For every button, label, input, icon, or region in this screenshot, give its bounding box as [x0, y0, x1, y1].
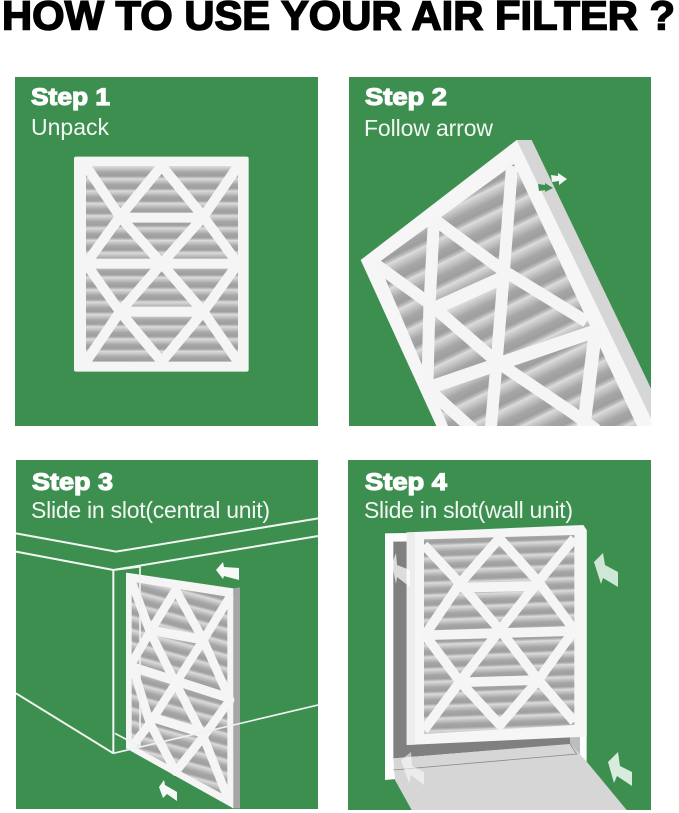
arrow: bottom insertion arrow: [159, 780, 177, 801]
panel: step 1: [15, 77, 318, 426]
step 3 heading: Step 3: [32, 469, 113, 496]
duct lines in front of filter: [113, 567, 318, 753]
air filter in central unit: [126, 573, 240, 808]
step 4 caption: Slide in slot(wall unit): [364, 497, 573, 523]
arrow: lower left: [401, 752, 424, 785]
panel: step 2: [349, 77, 655, 430]
central unit duct outline: [16, 518, 318, 753]
step 4 heading: Step 4: [365, 469, 447, 496]
panel: step 3: [16, 460, 318, 809]
arrow: white direction arrow: [551, 173, 567, 185]
arrow: lower right: [608, 752, 632, 786]
panel: step 4: [348, 460, 651, 810]
arrow: upper right: [594, 553, 618, 587]
step 2 caption: Follow arrow: [364, 115, 493, 141]
wall unit slot and floor: [385, 530, 627, 810]
arrow: upper left: [392, 553, 410, 587]
arrow: green direction arrow: [538, 183, 553, 192]
step 1 caption: Unpack: [31, 114, 110, 140]
air filter tilted view: [361, 140, 655, 430]
arrow: top insertion arrow: [216, 562, 239, 580]
air filter front view: [74, 157, 249, 372]
step 2 heading: Step 2: [365, 84, 447, 111]
step 3 caption: Slide in slot(central unit): [31, 497, 270, 523]
air filter in wall unit: [407, 525, 587, 745]
step 1 heading: Step 1: [31, 84, 110, 111]
